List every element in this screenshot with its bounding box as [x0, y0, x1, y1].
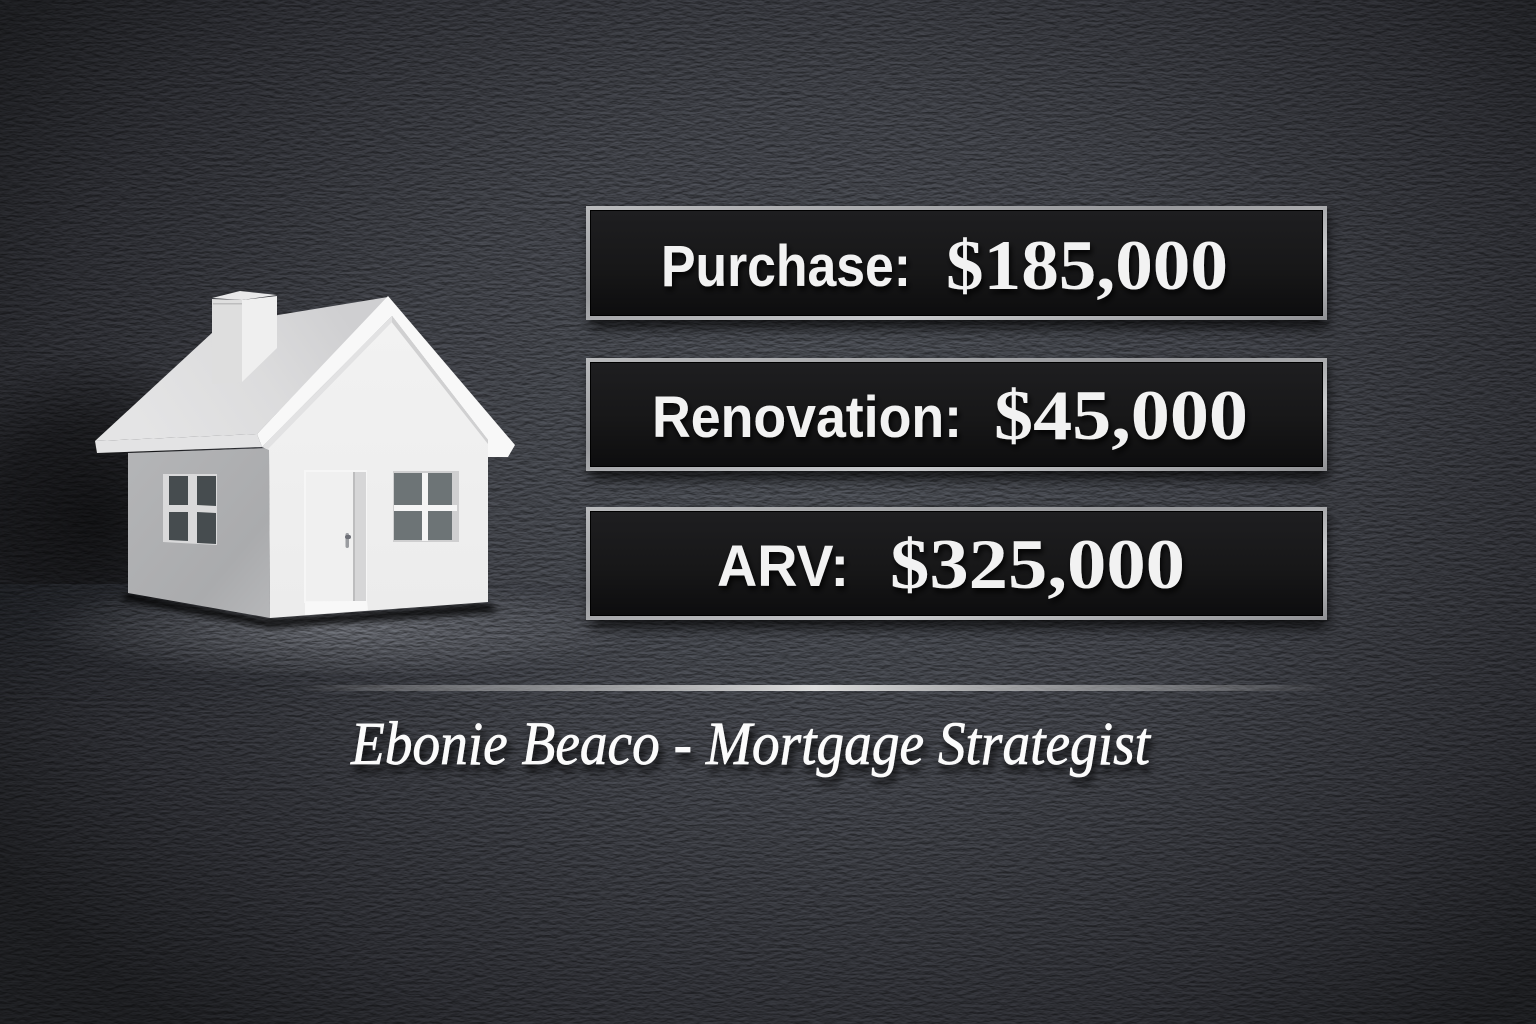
value: $325,000: $325,000	[890, 526, 1185, 604]
gable trim	[257, 296, 515, 457]
label: Renovation: Renovation:	[652, 385, 962, 450]
panel: renovation plate	[586, 358, 1328, 479]
panel: purchase plate	[586, 206, 1328, 328]
chimney	[212, 291, 277, 384]
panel: ARV plate	[586, 507, 1328, 628]
icon: white model house	[95, 291, 515, 628]
roof panel	[95, 297, 388, 441]
label: ARV: ARV:	[717, 534, 849, 599]
signature: presenter name and title: Ebonie Beaco - Mortgage Strategist	[350, 711, 1152, 778]
front door	[304, 470, 368, 615]
front window	[393, 471, 459, 542]
value: $185,000: $185,000	[946, 227, 1228, 305]
label: Purchase: Purchase:	[661, 234, 911, 299]
left side window	[163, 474, 217, 545]
value: $45,000: $45,000	[994, 377, 1248, 455]
divider: silver rule	[300, 685, 1330, 691]
